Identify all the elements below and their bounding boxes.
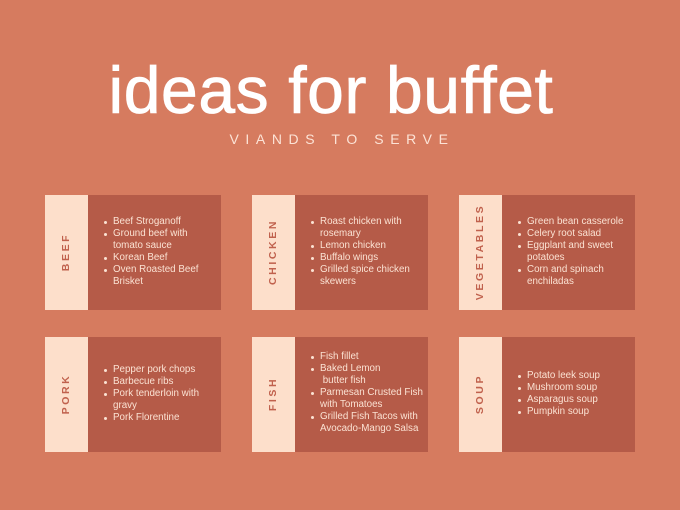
- title: ideas for buffet: [108, 53, 554, 127]
- panel: vegetables: Corn and spinach enchiladas: [527, 264, 604, 287]
- panel: vegetables: Eggplant and sweet potatoes: [527, 240, 613, 263]
- panel: pork: [45, 337, 221, 452]
- panel: soup: Mushroom soup: [527, 382, 597, 393]
- panel: chicken: [252, 195, 428, 310]
- panel: pork: Pork tenderloin with gravy: [113, 388, 199, 411]
- panel: beef: Korean Beef: [113, 252, 167, 263]
- panel: pork: Pepper pork chops: [113, 364, 195, 375]
- panel: fish: Parmesan Crusted Fish with Tomatoes: [320, 387, 423, 410]
- panel: vegetables: [459, 195, 635, 310]
- panel: soup: SOUP: [474, 374, 486, 414]
- panel: pork: PORK: [60, 374, 72, 414]
- panel: fish: [252, 337, 428, 452]
- panel: beef: Ground beef with tomato sauce: [113, 228, 188, 251]
- panel: soup: [459, 337, 635, 452]
- subtitle: VIANDS TO SERVE: [229, 131, 455, 147]
- panel: fish: Grilled Fish Tacos with Avocado-Mango Salsa: [320, 411, 418, 434]
- panel: chicken: Roast chicken with rosemary: [320, 216, 402, 239]
- panel: beef: Oven Roasted Beef Brisket: [113, 264, 199, 287]
- panel: fish: Baked Lemon: [320, 363, 380, 374]
- panel: pork: Pork Florentine: [113, 412, 179, 423]
- panel: soup: Potato leek soup: [527, 370, 600, 381]
- panel: soup: Pumpkin soup: [527, 406, 589, 417]
- panel: pork: Barbecue ribs: [113, 376, 173, 387]
- panel: chicken: Grilled spice chicken skewers: [320, 264, 410, 287]
- panel: vegetables: Celery root salad: [527, 228, 601, 239]
- panel: chicken: CHICKEN: [267, 219, 279, 285]
- panel: beef: BEEF: [60, 233, 72, 271]
- panel: fish: Fish fillet: [320, 351, 359, 362]
- panel: fish: FISH: [267, 377, 279, 411]
- panel: beef: [45, 195, 221, 310]
- panel: beef: Beef Stroganoff: [113, 216, 181, 227]
- panel: chicken: Lemon chicken: [320, 240, 386, 251]
- panel: vegetables: VEGETABLES: [474, 204, 486, 300]
- panel: chicken: Buffalo wings: [320, 252, 378, 263]
- panel: vegetables: Green bean casserole: [527, 216, 623, 227]
- panel: fish: butter fish: [323, 375, 366, 386]
- panel: soup: Asparagus soup: [527, 394, 598, 405]
